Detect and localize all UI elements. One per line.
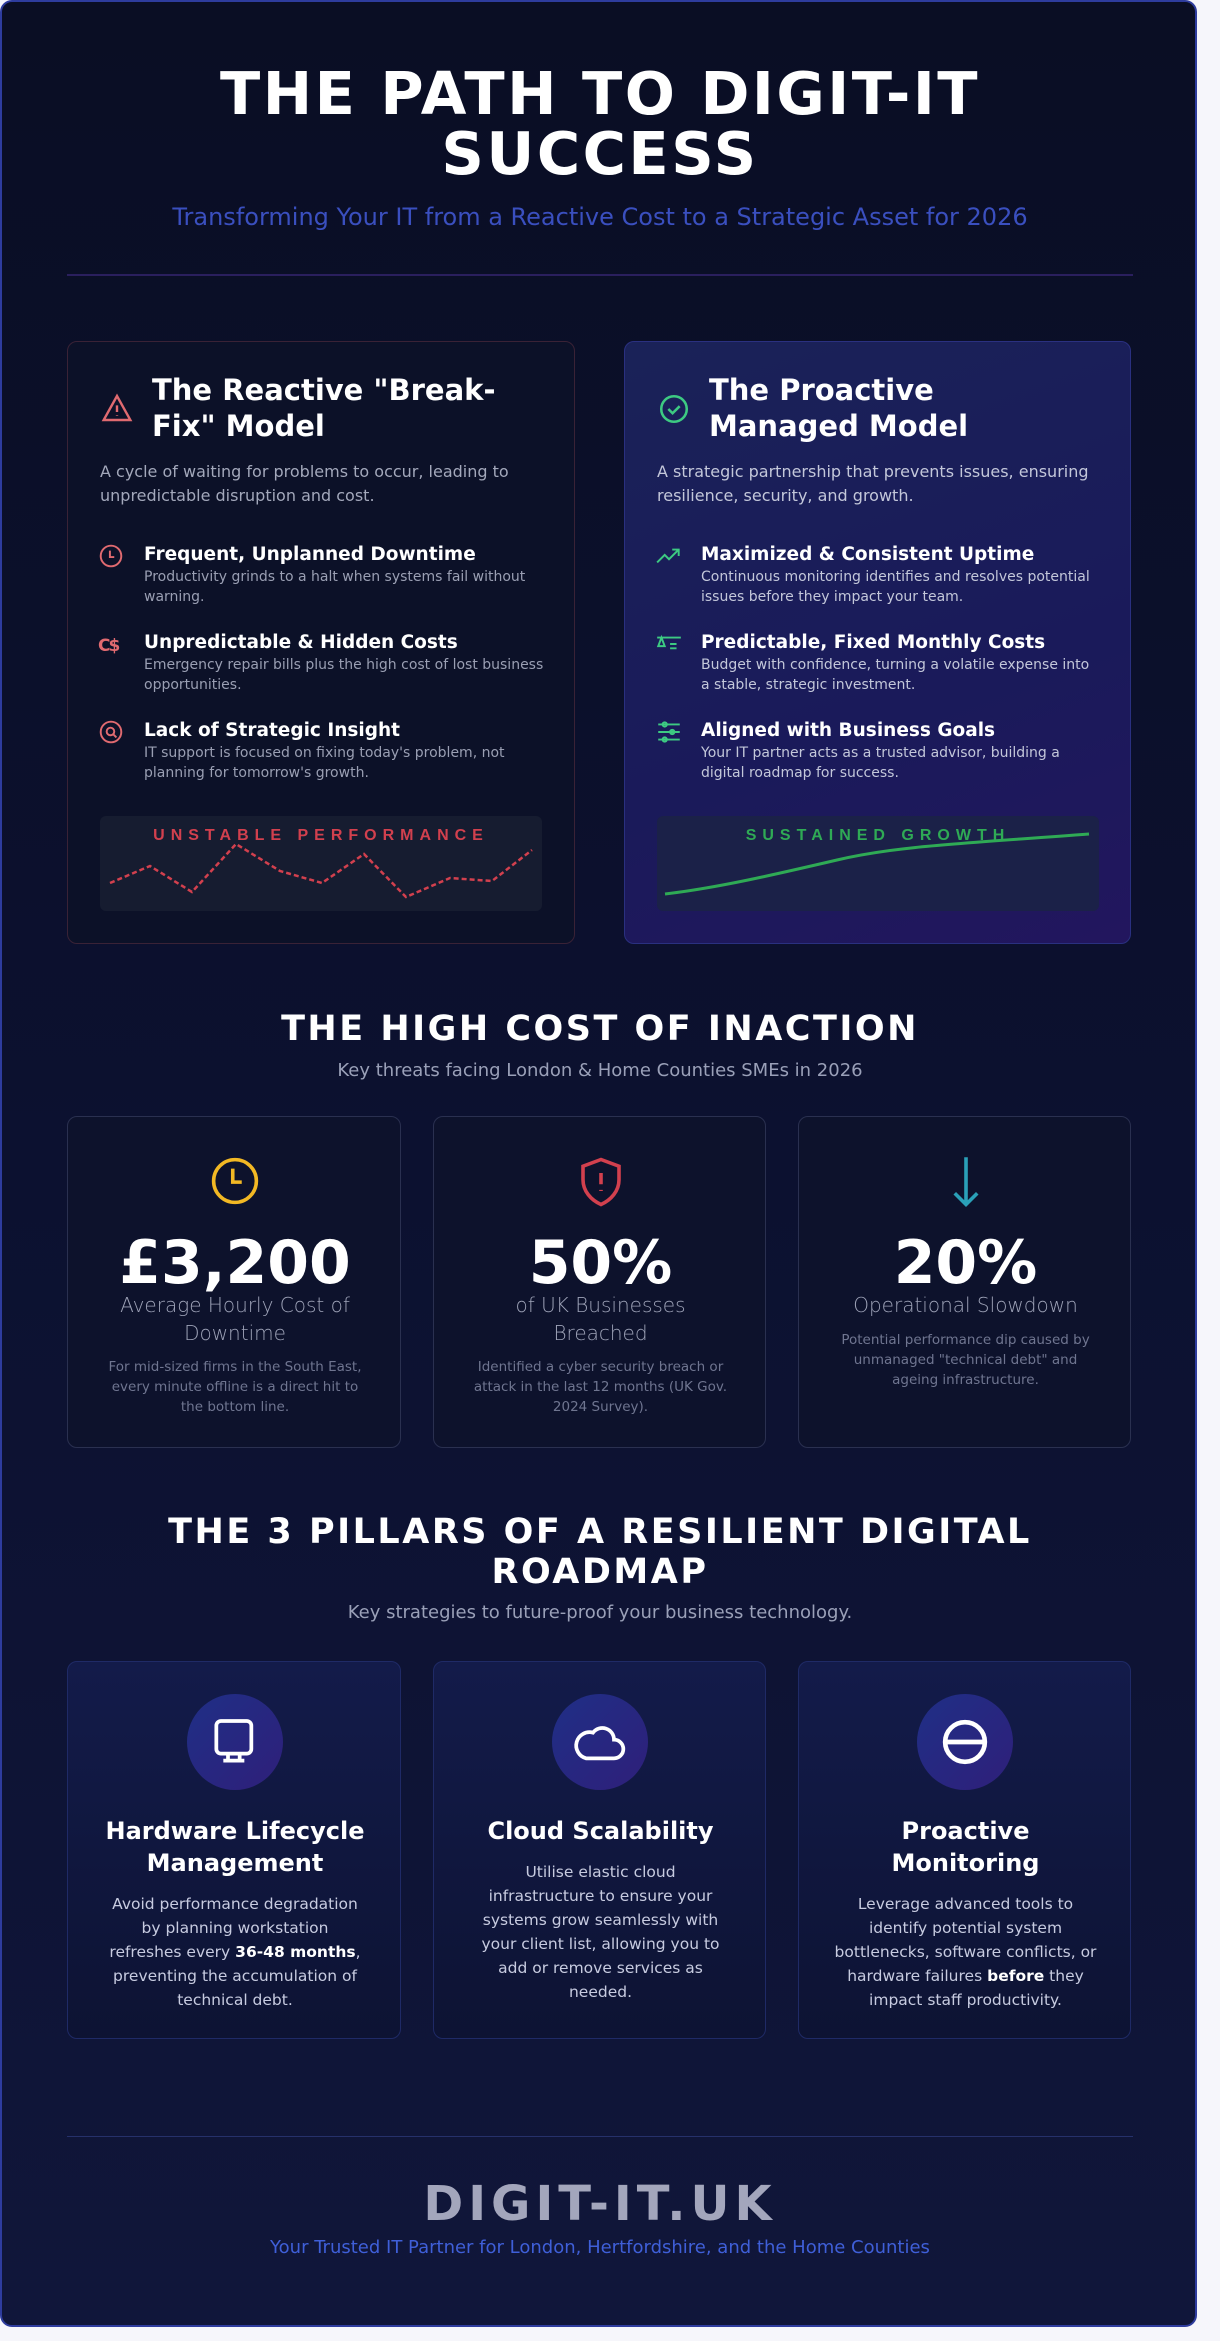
- item: costs: Emergency repair bills plus the high cost of lost business opportunities.: [144, 657, 543, 693]
- title: SUCCESS: [441, 119, 759, 188]
- number: £3,200: [119, 1228, 351, 1298]
- item: goals: Your IT partner acts as a trusted advisor, building a digital roadmap for success.: [701, 745, 1060, 781]
- icon: monitor: [187, 1694, 283, 1790]
- pillar: monitoring: [798, 1661, 1131, 2039]
- icon: cloud: [552, 1694, 648, 1790]
- item: costs: [98, 632, 543, 693]
- stat card: cost: [67, 1116, 401, 1448]
- icon: check circle: [660, 395, 688, 423]
- heading: high cost of inaction: THE HIGH COST OF INACTION: [281, 1009, 919, 1049]
- title: Proactive: [902, 1817, 1029, 1845]
- subheading: Key threats facing London & Home Counties SMEs in 2026: [337, 1060, 863, 1081]
- heading: 3 pillars: THE 3 PILLARS OF A RESILIENT DIGITAL ROADMAP: [168, 1512, 1032, 1592]
- pillar: hardware: [67, 1661, 401, 2039]
- description: Avoid performance degradation by planning workstation refreshes every 36-48 months, preventing the accumulation of technical debt.: [109, 1895, 361, 2009]
- item: fixed costs: [656, 632, 1089, 693]
- footer tagline: Your Trusted IT Partner for London, Hertfordshire, and the Home Counties: [270, 2237, 930, 2258]
- item: insight: IT support is focused on fixing today's problem, not planning for tomorrow's growth.: [144, 745, 505, 781]
- item: costs: Unpredictable & Hidden Costs: [144, 632, 458, 653]
- icon: shield: [581, 1158, 621, 1206]
- item: downtime: [100, 544, 525, 605]
- description: Leverage advanced tools to identify potential system bottlenecks, software conflicts, or hardware failures before they impact staff productivity.: [835, 1895, 1096, 2009]
- description: A cycle of waiting for problems to occur, leading to unpredictable disruption and cost.: [100, 462, 509, 505]
- item: insight: [100, 720, 505, 781]
- chart: unstable performance: UNSTABLE PERFORMANCE: [153, 827, 489, 844]
- item: uptime: Maximized & Consistent Uptime: [701, 544, 1034, 565]
- description: A strategic partnership that prevents issues, ensuring resilience, security, and growth.: [657, 462, 1089, 505]
- item: insight: Lack of Strategic Insight: [144, 720, 400, 741]
- item: goals: [658, 720, 1060, 781]
- subtitle: Transforming Your IT from a Reactive Cost to a Strategic Asset for 2026: [172, 203, 1028, 231]
- heading: The Proactive Managed Model: [709, 373, 968, 443]
- stat card: breached: [433, 1116, 766, 1448]
- label: Operational Slowdown: [853, 1293, 1078, 1317]
- chart: unstable performance: [100, 816, 542, 911]
- number: 50%: [529, 1228, 672, 1298]
- pillar: cloud: [433, 1661, 766, 2039]
- title: Cloud Scalability: [487, 1817, 714, 1845]
- title: THE PATH TO DIGIT-IT: [220, 59, 980, 128]
- heading: The Reactive "Break-Fix" Model: [152, 373, 496, 443]
- stat card: slowdown: [798, 1116, 1131, 1448]
- icon: monitoring: [917, 1694, 1013, 1790]
- panel: proactive model: [624, 341, 1131, 944]
- icon: down arrow: [954, 1157, 978, 1207]
- title: [220, 59, 980, 188]
- item: goals: Aligned with Business Goals: [701, 720, 995, 741]
- label: of UK Businesses Breached: [515, 1293, 686, 1345]
- item: uptime: [656, 544, 1090, 605]
- icon: clock: [212, 1158, 258, 1204]
- item: fixed costs: Budget with confidence, turning a volatile expense into a stable, strategic investment.: [701, 657, 1089, 693]
- description: Identified a cyber security breach or attack in the last 12 months (UK Gov. 2024 Survey).: [474, 1359, 727, 1415]
- item: downtime: Productivity grinds to a halt when systems fail without warning.: [144, 569, 525, 605]
- footer brand: DIGIT-IT.UK: [423, 2176, 777, 2232]
- number: 20%: [894, 1228, 1037, 1298]
- title: Hardware Lifecycle Management: [106, 1817, 364, 1877]
- description: For mid-sized firms in the South East, every minute offline is a direct hit to the bottom line.: [108, 1359, 362, 1415]
- description: Utilise elastic cloud infrastructure to ensure your systems grow seamlessly with your client list, allowing you to add or remove services as needed.: [481, 1863, 720, 2001]
- label: Average Hourly Cost of Downtime: [120, 1293, 350, 1345]
- item: costs: C$: [98, 636, 119, 656]
- item: fixed costs: Predictable, Fixed Monthly Costs: [701, 632, 1045, 653]
- chart: sustained growth: [657, 816, 1099, 911]
- icon: warning: [102, 394, 132, 422]
- chart: sustained growth: SUSTAINED GROWTH: [746, 827, 1010, 844]
- description: Potential performance dip caused by unmanaged "technical debt" and ageing infrastructure.: [841, 1332, 1090, 1388]
- title: [892, 1817, 1039, 1877]
- panel: reactive model: [67, 341, 575, 944]
- title: Monitoring: [892, 1849, 1039, 1877]
- item: downtime: Frequent, Unplanned Downtime: [144, 544, 476, 565]
- subheading: Key strategies to future-proof your business technology.: [348, 1602, 852, 1623]
- item: uptime: Continuous monitoring identifies and resolves potential issues before they impact your team.: [701, 569, 1090, 605]
